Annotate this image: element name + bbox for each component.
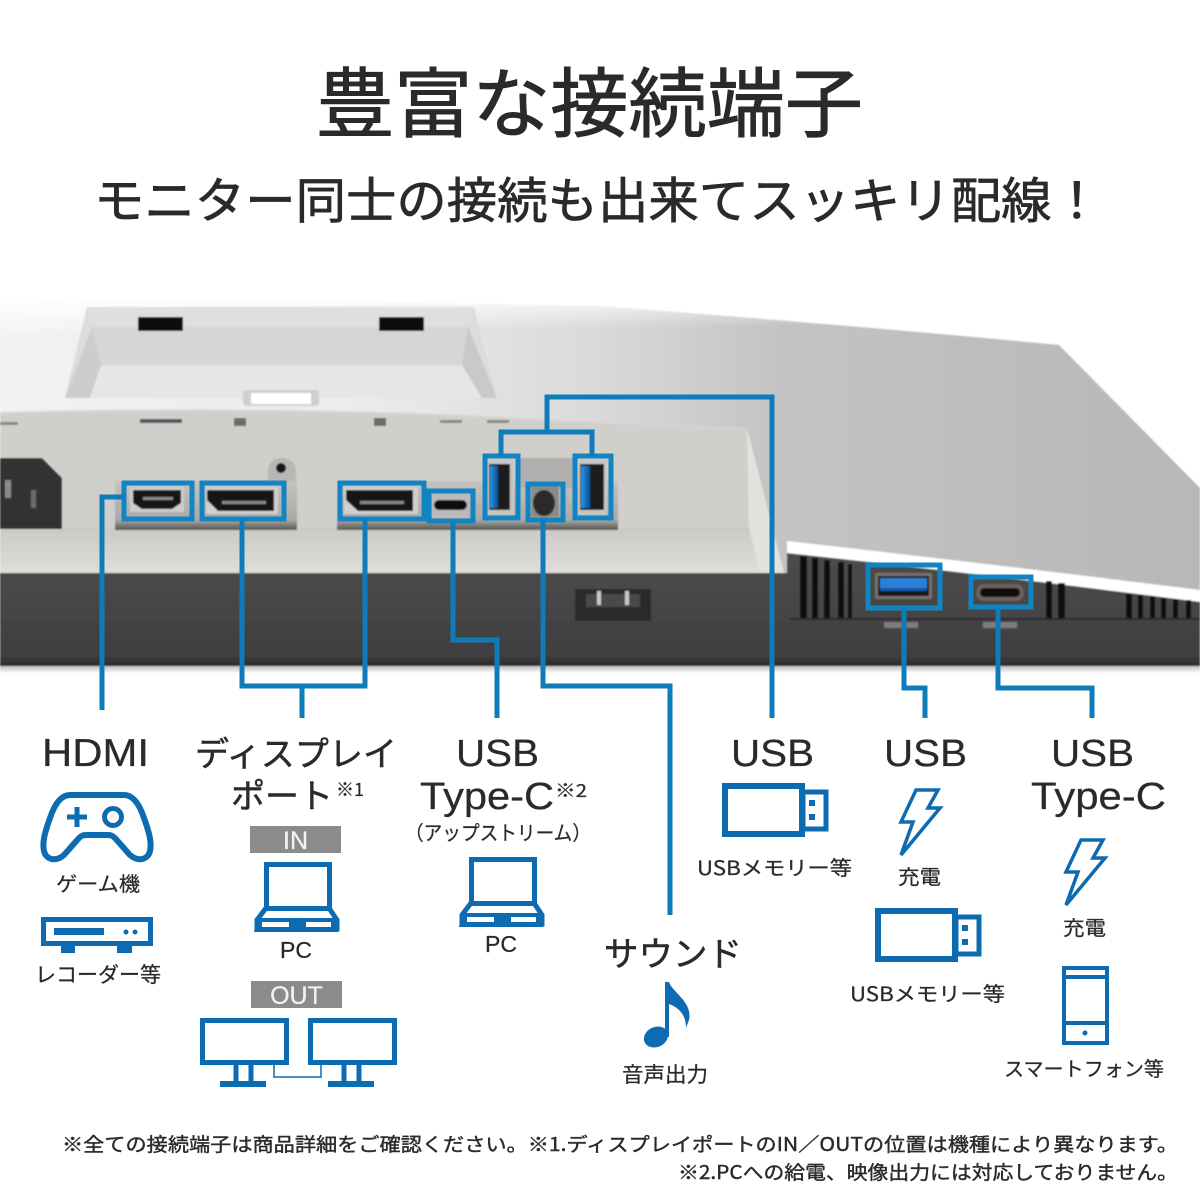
heading: Type-C: Type-C xyxy=(1031,776,1166,818)
footnote mark 1: ※1 xyxy=(336,776,364,802)
band lower shadow xyxy=(0,666,1200,673)
DisplayPort OUT port xyxy=(344,487,418,514)
badge: IN: IN xyxy=(283,827,308,855)
column: DisplayPort xyxy=(195,727,397,1087)
icon: USB stick xyxy=(725,786,826,834)
USB Type-C highlight and line xyxy=(429,491,497,718)
heading: USB: USB xyxy=(731,733,814,775)
heading: USB: USB xyxy=(456,733,539,775)
rear USB highlights and line xyxy=(485,397,772,718)
dark lower bezel band xyxy=(0,553,1200,666)
label: recorder: レコーダー等 xyxy=(35,959,161,989)
icon: daisy-chained monitors xyxy=(202,1020,394,1087)
icon: charge bolt xyxy=(1066,840,1105,905)
DisplayPort IN port xyxy=(206,487,278,514)
icon: charge bolt xyxy=(901,790,940,855)
icon: USB stick xyxy=(878,911,979,959)
icon: music note xyxy=(640,982,690,1051)
audio jack xyxy=(531,486,559,517)
HDMI port xyxy=(130,487,184,512)
top highlight fade xyxy=(0,290,1200,345)
footnote line 2: ※2.PCへの給電、映像出力には対応しておりません。 xyxy=(678,1158,1178,1185)
white bezel edge xyxy=(787,541,1200,602)
column: front USB xyxy=(850,733,1005,1007)
label: smartphone: スマートフォン等 xyxy=(1004,1053,1164,1082)
heading: HDMI: HDMI xyxy=(42,732,149,775)
column: USB Type-C upstream xyxy=(405,733,591,957)
badge: OUT: OUT xyxy=(270,982,323,1010)
power inlet xyxy=(0,458,62,529)
label: game console: ゲーム機 xyxy=(56,868,140,897)
monitor back shell xyxy=(0,296,1200,666)
column: front USB Type-C xyxy=(1004,733,1166,1082)
icon: laptop xyxy=(254,864,338,932)
label: USB memory: USBメモリー等 xyxy=(697,852,852,881)
port recess right xyxy=(337,458,618,530)
icon: smartphone xyxy=(1064,968,1107,1043)
subtitle: モニター同士の接続も出来てスッキリ配線！ xyxy=(94,162,1102,233)
front USB highlight and line xyxy=(868,565,940,718)
front USB-C port xyxy=(976,584,1024,601)
footnote line 1: ※全ての接続端子は商品詳細をご確認ください。※1.ディスプレイポートのIN／OUTの位置は機種により異なります。 xyxy=(62,1130,1178,1157)
callout lines and port highlight boxes xyxy=(102,397,1092,915)
icon: recorder xyxy=(44,920,150,953)
label: PC: PC xyxy=(280,937,312,963)
icon: laptop xyxy=(459,860,543,927)
USB Type-C upstream port xyxy=(432,493,469,518)
vents xyxy=(800,556,1191,618)
DisplayPort highlights and line xyxy=(202,483,424,718)
label: PC: PC xyxy=(485,931,517,957)
label: charging: 充電 xyxy=(1063,912,1106,941)
stand latch xyxy=(243,390,319,406)
vent shelf shade xyxy=(790,618,1200,620)
rear center connector xyxy=(575,589,651,621)
column: sound xyxy=(604,927,742,1089)
label: audio output: 音声出力 xyxy=(622,1059,708,1089)
front USB port xyxy=(875,573,932,599)
rear USB port right xyxy=(578,459,607,515)
rear USB port left xyxy=(487,459,514,515)
label: upstream: （アップストリーム） xyxy=(405,817,591,846)
footnote mark 2: ※2 xyxy=(555,777,587,803)
heading: USB: USB xyxy=(884,733,967,775)
heading: sound: サウンド xyxy=(604,927,742,976)
front USB-C highlight and line xyxy=(971,577,1092,718)
column: HDMI xyxy=(35,732,161,989)
heading: DisplayPort second line: ポート xyxy=(231,769,333,818)
heading: USB: USB xyxy=(1051,733,1134,775)
label: charging: 充電 xyxy=(898,861,941,890)
badge: IN xyxy=(250,826,341,855)
stand bracket xyxy=(65,307,497,398)
monitor rear photo xyxy=(0,290,1200,673)
heading: Type-C: Type-C xyxy=(420,776,554,818)
audio highlight and line xyxy=(528,484,670,915)
port recess left xyxy=(115,458,297,530)
label: USB memory: USBメモリー等 xyxy=(850,978,1005,1007)
front port engraved labels xyxy=(884,622,1017,628)
badge: OUT xyxy=(251,981,342,1010)
title: 豊富な接続端子 xyxy=(316,43,863,153)
icon: game controller xyxy=(43,795,151,859)
HDMI highlight and line xyxy=(102,483,192,710)
heading: DisplayPort: ディスプレイ xyxy=(195,727,397,776)
port panel xyxy=(0,409,784,573)
column: rear USB xyxy=(697,733,852,881)
